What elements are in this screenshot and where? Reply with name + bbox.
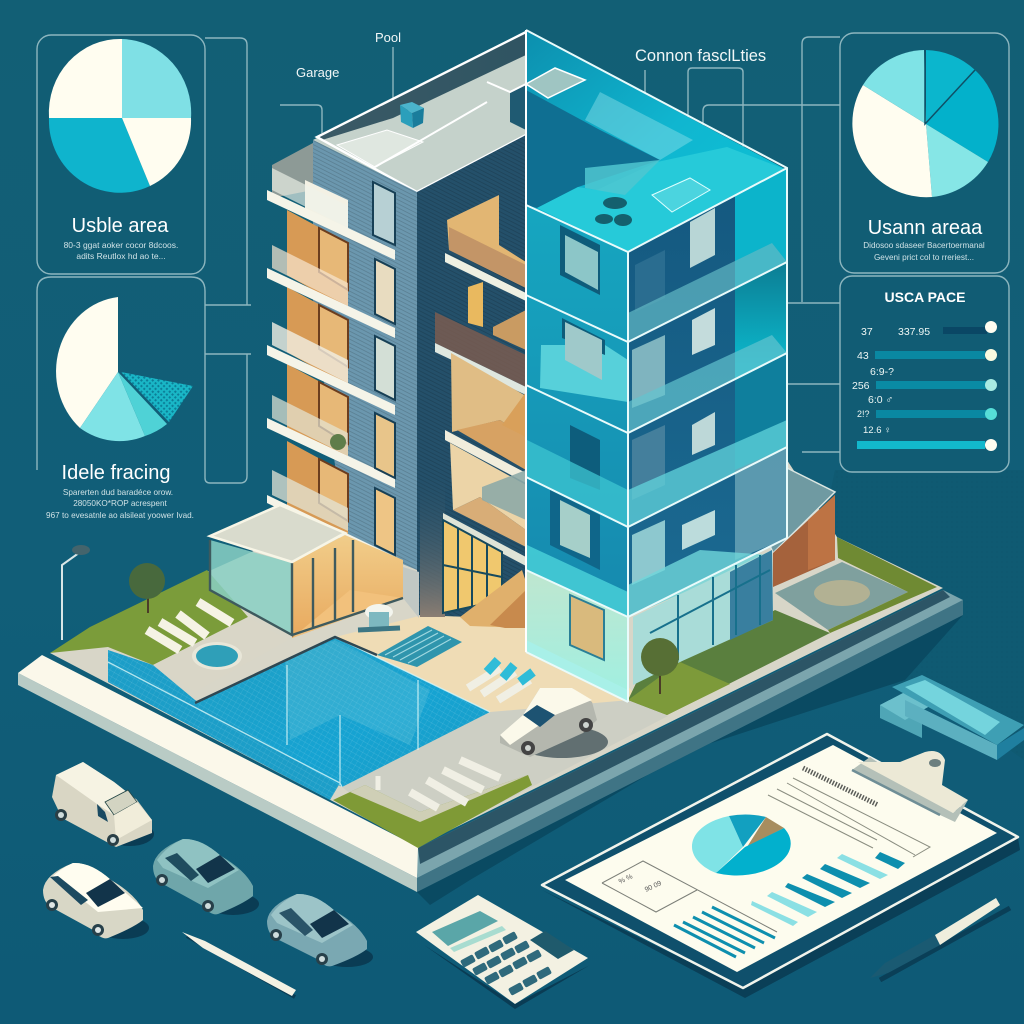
grass: front lawn bbox=[333, 775, 532, 848]
text block: usable area: 80-3 ggat aoker cocor 8dcoos. bbox=[64, 240, 178, 250]
left face floor 1 bbox=[560, 225, 600, 295]
facade base bbox=[403, 567, 419, 618]
terrace floor bbox=[537, 147, 787, 252]
patio base bbox=[50, 350, 943, 846]
clipboard bbox=[542, 734, 1020, 998]
orange floor 1 bbox=[287, 210, 348, 310]
hot tub bbox=[192, 642, 242, 670]
facade bbox=[313, 140, 417, 570]
calculator screen bbox=[432, 911, 498, 946]
rooftop room bbox=[585, 160, 660, 195]
terrace bed outline bbox=[652, 178, 710, 212]
wing brick wall bbox=[773, 495, 835, 587]
floors right face bbox=[628, 168, 787, 617]
floors left face bbox=[526, 205, 628, 617]
terrace furniture bbox=[595, 197, 632, 226]
right face windows 4 bbox=[632, 510, 715, 585]
right face balcony 2 bbox=[628, 335, 787, 433]
loungers: blue bbox=[468, 660, 533, 700]
facade window 3 bbox=[375, 336, 395, 400]
upper interior light band bbox=[585, 92, 693, 160]
building back wing bbox=[760, 460, 937, 633]
see-through column 1 bbox=[735, 168, 787, 290]
cut-away stairs bbox=[460, 570, 526, 628]
ground floor window wall bbox=[633, 550, 773, 685]
pen: right bbox=[870, 898, 1010, 980]
pool water bbox=[195, 637, 490, 787]
dotted backdrop bbox=[800, 470, 1024, 760]
lower-right paving bbox=[342, 700, 668, 846]
pavilion glass left bbox=[210, 540, 292, 635]
loungers: lawn bbox=[147, 602, 232, 650]
roof bbox=[313, 32, 526, 192]
clipboard table: 90 09 bbox=[644, 880, 663, 894]
pool reflection bbox=[285, 640, 430, 745]
platform grey rim bbox=[417, 590, 963, 878]
clipboard table bbox=[602, 861, 777, 957]
wing grass bbox=[828, 537, 937, 633]
heading: usable area: Usble area bbox=[72, 215, 169, 237]
clipboard table: % % bbox=[618, 873, 634, 886]
cut-away windows bbox=[443, 520, 502, 613]
text block: usann area: Geveni prict col to rreriest... bbox=[874, 253, 974, 262]
ground floor left bbox=[526, 570, 628, 702]
clipboard clip bbox=[852, 751, 968, 822]
right face balcony 3 bbox=[628, 420, 787, 527]
pool highlight edge bbox=[108, 637, 490, 787]
text block: usable area bbox=[64, 240, 178, 261]
balcony 5 bbox=[267, 470, 398, 566]
wing court bbox=[775, 562, 908, 630]
wing roof bbox=[760, 460, 835, 553]
panel: usable area bbox=[37, 35, 205, 274]
label: common facilities: Connon fasclLties bbox=[635, 47, 766, 65]
orange floor 4 bbox=[287, 441, 348, 538]
facade window 5 bbox=[375, 488, 395, 555]
clipboard bars bbox=[751, 852, 905, 926]
cut-away room 2 balcony bbox=[435, 310, 526, 395]
glass plate lines bbox=[526, 30, 787, 702]
dark side wall bbox=[417, 135, 526, 617]
left face floor 2 bbox=[540, 318, 628, 402]
orange floor 3 bbox=[287, 364, 348, 464]
roof skylight bbox=[337, 130, 423, 167]
see-through column 2 bbox=[735, 262, 787, 380]
street lamp bbox=[62, 545, 90, 640]
bar list: usca pace: 337.95 bbox=[898, 326, 930, 338]
see-through column 3 bbox=[735, 353, 787, 472]
text block: usann area: Didosoo sdaseer Bacertoermanal bbox=[863, 241, 985, 250]
pie chart: usann area bbox=[852, 50, 998, 197]
facade window 4 bbox=[375, 413, 395, 478]
callout connector lines bbox=[205, 37, 840, 483]
lower wall fade bbox=[420, 470, 445, 617]
building: left tower bbox=[267, 32, 555, 628]
balcony plant bbox=[330, 434, 346, 450]
roof cube bbox=[400, 102, 424, 128]
upper cyan shell bbox=[526, 30, 787, 252]
right face balcony 4 bbox=[628, 550, 770, 617]
car: teal 1 bbox=[153, 839, 259, 915]
spa deck stripes bbox=[377, 626, 462, 667]
pavilion lounge bbox=[292, 535, 403, 638]
text block: usann area bbox=[863, 241, 985, 262]
platform left side bbox=[18, 673, 417, 892]
grass: left lawn bbox=[50, 570, 248, 665]
balcony 4 bbox=[267, 395, 395, 488]
patio table bbox=[358, 604, 400, 630]
bar list: usca pace: 6:0 ♂ bbox=[868, 394, 893, 406]
platform trench bbox=[418, 590, 950, 864]
left face floor 4 bbox=[527, 490, 628, 617]
text block: idle fracing: 28050KO*ROP acrespent bbox=[73, 499, 168, 508]
bar list: usca pace bbox=[852, 321, 997, 451]
pool bbox=[108, 637, 490, 800]
bar list: usca pace: 6:9-? bbox=[870, 366, 894, 378]
bar list: usca pace: 2!? bbox=[857, 409, 870, 419]
car: teal 2 bbox=[267, 894, 373, 967]
right face windows 1 bbox=[635, 208, 715, 312]
labels: top callouts bbox=[296, 30, 766, 80]
clipboard text lines bbox=[768, 778, 930, 857]
right face balcony 1 bbox=[628, 243, 787, 342]
facade window 1 bbox=[373, 182, 395, 245]
left face floor 3 bbox=[527, 425, 628, 527]
cut-away room 4 bbox=[443, 443, 526, 566]
shadow under platform bbox=[417, 615, 963, 905]
bar list: usca pace: 37 bbox=[861, 326, 873, 338]
panel: usca pace bbox=[840, 276, 1009, 472]
balcony 3 bbox=[267, 322, 395, 415]
tree: left bbox=[129, 563, 165, 613]
pavilion roof bbox=[210, 505, 345, 562]
cut-away room 1 bbox=[445, 195, 526, 301]
pavilion floor bbox=[292, 590, 403, 638]
text block: idle fracing: Sparerten dud baradéce orow. bbox=[63, 488, 173, 497]
pen: left bbox=[182, 932, 296, 997]
pool edge dark bbox=[195, 637, 377, 703]
center division line bbox=[525, 30, 527, 652]
warm terrace by building bbox=[335, 575, 640, 745]
pie chart: idle fracing bbox=[56, 297, 193, 441]
parapet inner wall bbox=[318, 32, 526, 140]
right face louvers bbox=[735, 447, 787, 560]
cut-away doorway bbox=[468, 282, 483, 327]
roof stair shaft bbox=[375, 55, 555, 167]
pool front wall bbox=[108, 650, 340, 800]
pie chart: usable area bbox=[49, 39, 191, 193]
connector highlight bbox=[759, 363, 787, 384]
platform right side bbox=[417, 600, 963, 892]
heading: usann area: Usann areaa bbox=[868, 217, 983, 239]
text block: idle fracing: 967 to evesatnle ao alsileat yoower Ivad. bbox=[46, 511, 194, 520]
platform cream rim bbox=[18, 655, 420, 878]
pavilion bbox=[210, 505, 403, 638]
calculator strip bbox=[450, 926, 506, 952]
label: garage: Garage bbox=[296, 65, 339, 80]
clipboard paper bbox=[565, 745, 997, 972]
car: white bbox=[43, 863, 149, 939]
upper interior dark bbox=[526, 90, 660, 208]
clipboard board bbox=[542, 734, 1018, 988]
cut-away room 3 bbox=[445, 353, 526, 483]
clipboard pie chart bbox=[692, 815, 791, 875]
grass: right lawn bbox=[628, 610, 830, 715]
clipboard shadow bbox=[542, 838, 1020, 998]
left tiled patio bbox=[153, 617, 288, 692]
bar list: usca pace: 12.6 ♀ bbox=[863, 425, 891, 436]
panel: idle fracing bbox=[37, 277, 205, 520]
heading: idle fracing: Idele fracing bbox=[62, 462, 170, 484]
balcony 1 bbox=[267, 143, 395, 260]
text block: idle fracing bbox=[46, 488, 194, 520]
tree: right bbox=[641, 638, 679, 694]
rooftop shaft bbox=[526, 68, 585, 98]
car: parked white bbox=[500, 688, 608, 758]
loungers: front bbox=[378, 760, 500, 808]
box: top right bbox=[880, 675, 1024, 760]
label: pool: Pool bbox=[375, 30, 401, 45]
van bbox=[52, 762, 154, 847]
balcony 2 bbox=[267, 245, 395, 338]
right face windows 3 bbox=[632, 412, 715, 500]
building: glass tower bbox=[526, 30, 787, 702]
text block: usable area: adits Reutlox hd ao te... bbox=[76, 251, 166, 261]
clipboard title ticks bbox=[803, 768, 878, 805]
platform bbox=[18, 350, 963, 892]
cut-away stairs 3 bbox=[502, 392, 526, 437]
right face windows 2 bbox=[632, 308, 715, 408]
roof outline bbox=[317, 32, 526, 192]
heading: usca pace: USCA PACE bbox=[885, 289, 965, 305]
facade window 2 bbox=[375, 259, 395, 324]
calculator bbox=[416, 895, 590, 1009]
calculator keys bbox=[460, 931, 552, 996]
bar list: usca pace: 43 bbox=[857, 350, 869, 362]
bar list: usca pace: 256 bbox=[852, 380, 870, 392]
pavilion frames bbox=[210, 540, 403, 635]
orange floor 2 bbox=[287, 287, 348, 387]
panel: usann area bbox=[840, 33, 1009, 273]
